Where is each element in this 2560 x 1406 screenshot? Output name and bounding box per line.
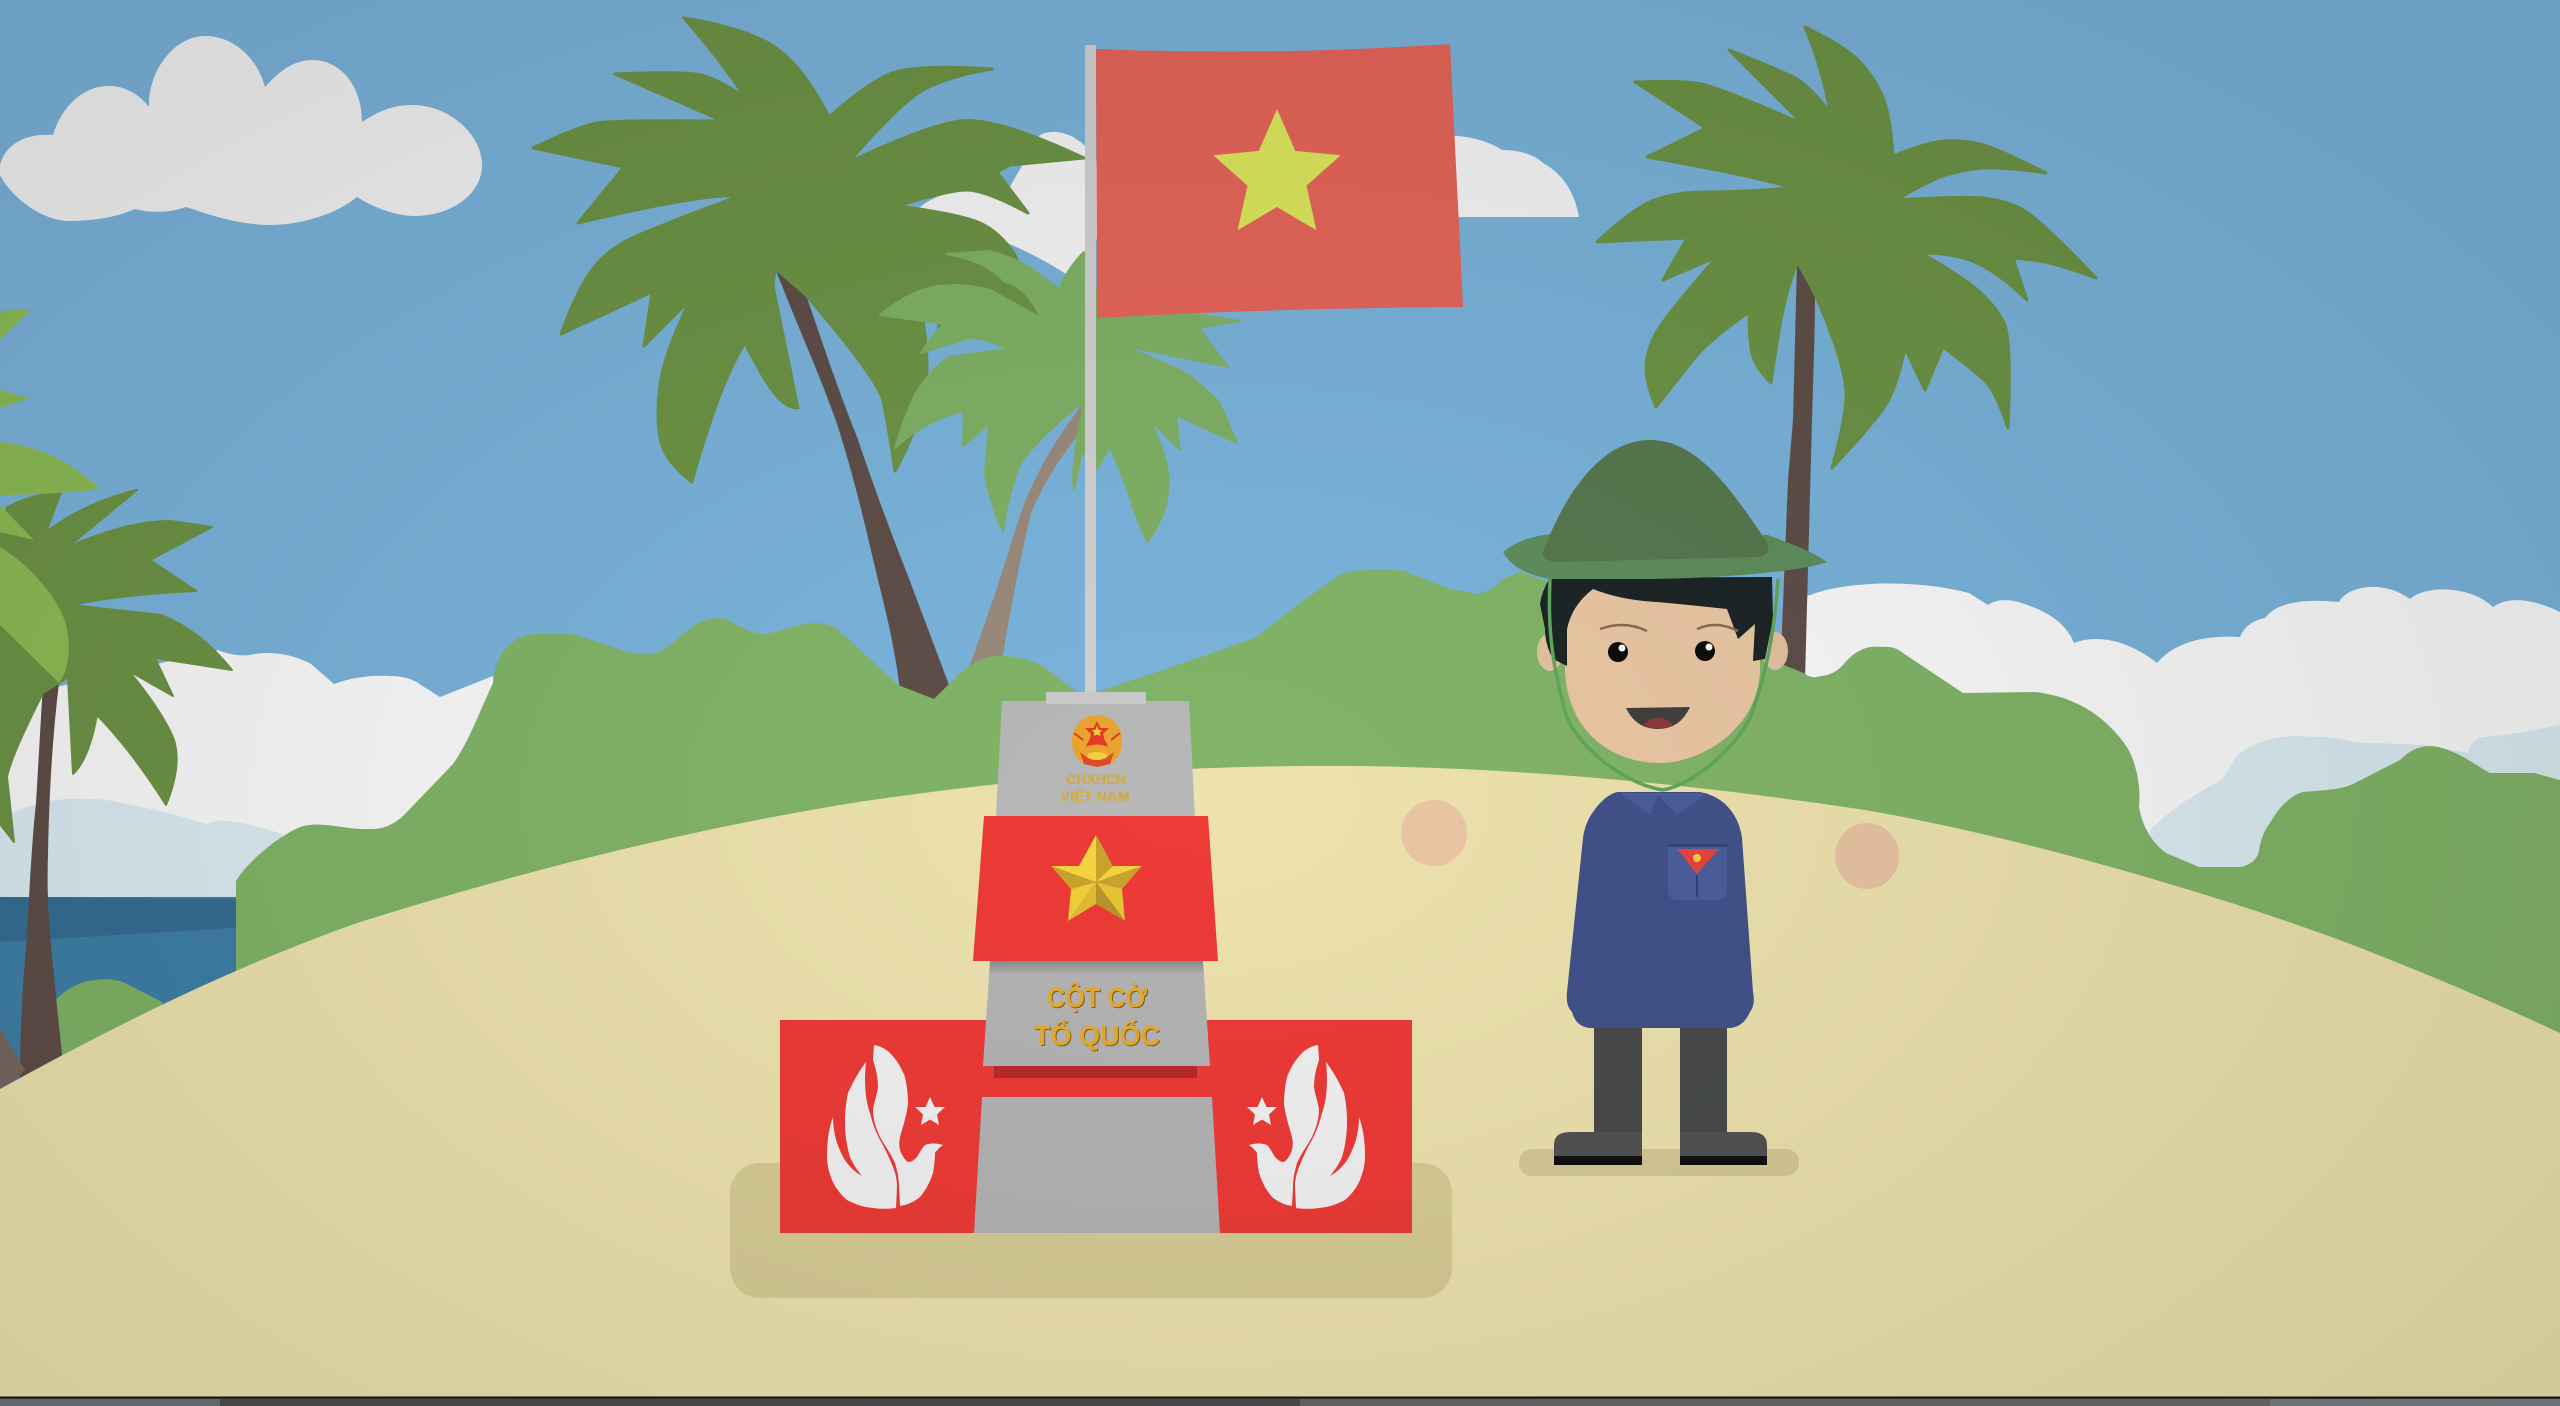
block shadow xyxy=(989,961,1204,974)
green hills xyxy=(236,569,2560,1200)
hat crown xyxy=(1543,440,1768,562)
golden star xyxy=(1051,835,1142,921)
right dove and flame emblem xyxy=(1247,1045,1365,1209)
dark red ledge xyxy=(994,1066,1197,1078)
legs xyxy=(1594,1020,1727,1138)
cloud: top left xyxy=(0,36,482,225)
flag pole xyxy=(1085,45,1096,695)
emblem caption: CHXHCN xyxy=(1066,771,1126,787)
ground shadow xyxy=(1519,1149,1799,1176)
hat brim xyxy=(1503,533,1827,579)
bush: bottom left xyxy=(36,979,170,1070)
cloud: right white mass xyxy=(1790,583,2560,900)
ears xyxy=(1537,632,1788,671)
dark fronds xyxy=(0,490,232,842)
cloud: right pale blue xyxy=(2150,725,2560,900)
trunk xyxy=(960,402,1084,690)
mouth xyxy=(1626,707,1690,729)
fronds xyxy=(533,18,1084,482)
state emblem xyxy=(1072,715,1122,767)
emblem caption: VIỆT NAM xyxy=(1060,787,1130,804)
sandy ground xyxy=(0,766,2560,1406)
window edge at bottom xyxy=(0,1396,2560,1406)
emblem caption xyxy=(1060,771,1130,804)
small frond tip xyxy=(936,318,962,352)
eyes xyxy=(1608,641,1715,662)
flag tower monument xyxy=(780,692,1412,1233)
cloud: left white mass xyxy=(0,650,520,900)
trunk xyxy=(1780,262,1815,680)
pole cap xyxy=(1046,692,1146,704)
monument inscription: CỘT CỜ xyxy=(1047,981,1147,1013)
left dove and flame emblem xyxy=(827,1045,945,1209)
hair xyxy=(1540,577,1773,666)
right hand xyxy=(1835,823,1899,889)
fronds xyxy=(1597,27,2096,468)
pocket with badge xyxy=(1668,844,1727,900)
monument shadow xyxy=(730,1163,1452,1298)
trunk xyxy=(20,683,62,1085)
flag field xyxy=(1096,44,1463,318)
trunk xyxy=(775,268,949,710)
collar xyxy=(1620,793,1707,815)
face xyxy=(1565,578,1760,763)
red star band xyxy=(973,816,1218,961)
left hand xyxy=(1401,800,1467,866)
middle grey block xyxy=(983,961,1210,1066)
cloud: behind flag xyxy=(915,132,1579,280)
cloud: left pale blue xyxy=(0,799,282,900)
monument inscription: TỔ QUỐC xyxy=(1034,1019,1160,1051)
light fronds xyxy=(0,309,100,683)
palm tree: far left xyxy=(0,309,232,1095)
shirt xyxy=(1567,792,1754,1028)
eyebrows xyxy=(1600,625,1738,631)
sea xyxy=(0,897,300,1117)
monument inscription xyxy=(1034,981,1160,1051)
national flag xyxy=(1096,44,1463,318)
palm tree: light centre xyxy=(880,251,1240,690)
flag star xyxy=(1213,109,1341,230)
boots xyxy=(1554,1132,1767,1165)
red base xyxy=(780,1020,1412,1233)
soldier character xyxy=(1503,440,1827,1176)
chin strap xyxy=(1549,579,1778,790)
lower grey pillar xyxy=(974,1097,1220,1233)
palm tree: right xyxy=(1597,27,2096,680)
stump xyxy=(0,1028,25,1095)
top grey block xyxy=(996,701,1195,816)
palm tree: dark centre xyxy=(533,18,1084,710)
fronds xyxy=(880,251,1240,542)
